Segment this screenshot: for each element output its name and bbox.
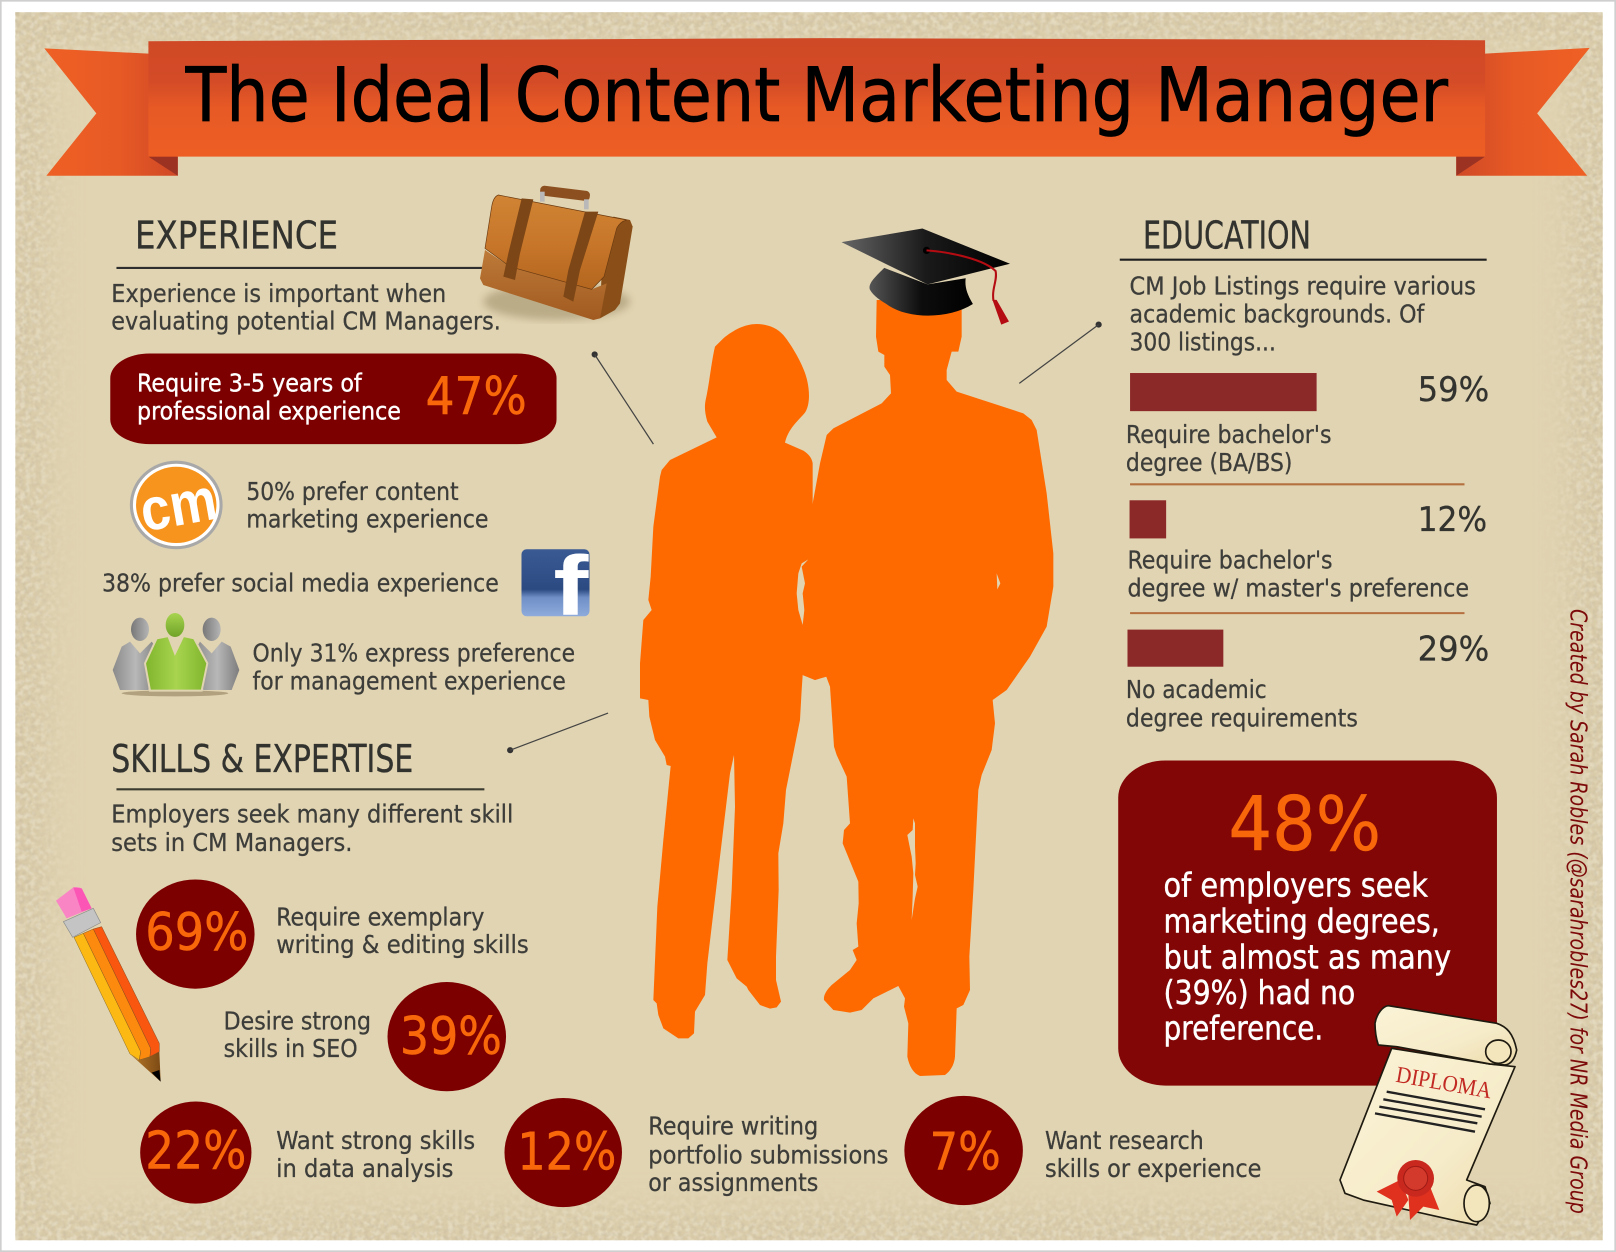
- icon: facebook: [521, 539, 590, 633]
- icon: people: [113, 613, 239, 696]
- text: education intro: 300 listings...: [1130, 327, 1276, 356]
- connector to skills: [507, 713, 608, 753]
- icon: facebook: f: [553, 539, 590, 633]
- bar chart row: 12%: Require bachelor's: [1127, 545, 1333, 574]
- pocket slit: [997, 573, 1000, 589]
- bar chart row: 12%: degree w/ master's preference: [1127, 574, 1469, 603]
- heading: experience: EXPERIENCE: [135, 213, 338, 257]
- text: research: skills or experience: [1045, 1154, 1261, 1183]
- silhouettes of a woman and a man: [640, 300, 1053, 1076]
- text: education intro: academic backgrounds. Of: [1130, 300, 1425, 329]
- text: research: [1045, 1126, 1261, 1183]
- gap between man's legs: [907, 818, 918, 920]
- bar chart row: 29%: [1126, 630, 1489, 732]
- callout: 48%: preference.: [1164, 1009, 1323, 1048]
- diploma seal: [1377, 1160, 1439, 1220]
- text: writing: [276, 902, 529, 959]
- panel: skills and expertise: [56, 737, 1261, 1207]
- callout: 48%: [1118, 760, 1497, 1086]
- callout: 47%: 47%: [426, 367, 527, 427]
- text: content marketing: [246, 477, 489, 534]
- stat: 69%: 69%: [145, 903, 248, 963]
- text: research: Want research: [1045, 1126, 1204, 1155]
- bar chart row: 29%: No academic: [1126, 675, 1267, 704]
- icon: briefcase: [480, 185, 633, 320]
- text: social media: 38% prefer social media experience: [102, 568, 499, 597]
- bar chart row: 59%: degree (BA/BS): [1126, 448, 1292, 477]
- text: skills intro: Employers seek many different skill: [111, 799, 513, 828]
- banner right tail: [1456, 48, 1590, 176]
- text: portfolio: or assignments: [648, 1168, 818, 1197]
- text: data analysis: in data analysis: [276, 1154, 453, 1183]
- stat: 12%: 12%: [517, 1123, 616, 1183]
- text: portfolio: portfolio submissions: [648, 1140, 888, 1169]
- icon: diploma scroll: [1340, 1006, 1517, 1225]
- text: seo: Desire strong: [224, 1006, 371, 1035]
- bar chart row: 59%: Require bachelor's: [1126, 420, 1332, 449]
- stat: 7%: [904, 1096, 1023, 1205]
- bar chart row: 12%: 12%: [1418, 500, 1487, 540]
- man silhouette: [803, 300, 1053, 1076]
- stat: 7%: 7%: [930, 1123, 1001, 1183]
- heading: skills: SKILLS & EXPERTISE: [111, 737, 413, 781]
- title banner: [44, 38, 1590, 176]
- diploma text lines: [1375, 1092, 1485, 1132]
- title: The Ideal Content Marketing Manager: [185, 51, 1448, 139]
- text: seo: [224, 1006, 371, 1063]
- callout: 48%: marketing degrees,: [1164, 902, 1440, 941]
- text: experience intro: [111, 279, 501, 336]
- text: portfolio: Require writing: [648, 1112, 818, 1141]
- woman silhouette: [640, 324, 827, 1038]
- panel: education: [1118, 213, 1517, 1225]
- callout: 48%: but almost as many: [1164, 938, 1451, 977]
- icon: graduation cap: [841, 228, 1010, 325]
- connector to experience: [592, 351, 653, 444]
- connector to education: [1019, 322, 1102, 383]
- icon: pencil: [56, 887, 161, 1082]
- text: management: Only 31% express preference: [252, 639, 575, 668]
- text: content marketing: 50% prefer content: [246, 477, 459, 506]
- text: writing: Require exemplary: [276, 902, 484, 931]
- text: management: [252, 639, 575, 695]
- text: data analysis: Want strong skills: [276, 1126, 475, 1155]
- text: content marketing: marketing experience: [246, 505, 489, 534]
- text: experience intro: evaluating potential CM Managers.: [111, 307, 501, 336]
- text: skills intro: [111, 799, 513, 857]
- bar chart row: 12%: [1127, 500, 1487, 603]
- text: education intro: CM Job Listings require various: [1130, 272, 1476, 301]
- banner fold left: [148, 157, 178, 176]
- callout: 47%: [110, 353, 557, 444]
- callout: 48%: 48%: [1228, 780, 1381, 868]
- stat: 22%: [140, 1102, 251, 1204]
- gap between figures: [797, 559, 808, 625]
- text: portfolio: [648, 1112, 888, 1197]
- bar chart row: 29%: 29%: [1418, 630, 1489, 670]
- stat: 69%: [136, 879, 255, 989]
- banner main: [148, 38, 1485, 157]
- text: seo: skills in SEO: [224, 1034, 358, 1063]
- text: management: for management experience: [252, 666, 566, 695]
- callout: 48%: (39%) had no: [1164, 973, 1355, 1012]
- callout: 47%: Require 3-5 years of: [137, 369, 363, 398]
- bar chart row: 59%: [1126, 370, 1489, 477]
- text: skills intro: sets in CM Managers.: [111, 828, 352, 857]
- stat: 39%: 39%: [400, 1007, 502, 1067]
- credit line: Created by Sarah Robles (@sarahrobles27) for NR Media Group: [1565, 609, 1591, 1214]
- icon: cm logo: cm: [135, 465, 222, 544]
- text: experience intro: Experience is important when: [111, 279, 446, 308]
- text: writing: writing & editing skills: [276, 930, 529, 959]
- diploma label: DIPLOMA: [1394, 1062, 1494, 1104]
- bar chart row: 29%: degree requirements: [1126, 703, 1358, 732]
- callout: 47%: professional experience: [137, 396, 401, 425]
- text: education intro: [1130, 272, 1476, 356]
- callout: 48%: of employers seek: [1164, 865, 1429, 904]
- connector lines: [507, 322, 1102, 753]
- stat: 12%: [504, 1098, 622, 1207]
- banner fold right: [1456, 157, 1485, 176]
- banner left tail: [44, 48, 178, 176]
- heading: education: EDUCATION: [1143, 213, 1311, 257]
- stat: 22%: 22%: [145, 1122, 246, 1182]
- stat: 39%: [388, 982, 506, 1091]
- text: data analysis: [276, 1126, 475, 1183]
- bar chart row: 59%: 59%: [1418, 370, 1489, 410]
- panel: experience: [102, 185, 633, 696]
